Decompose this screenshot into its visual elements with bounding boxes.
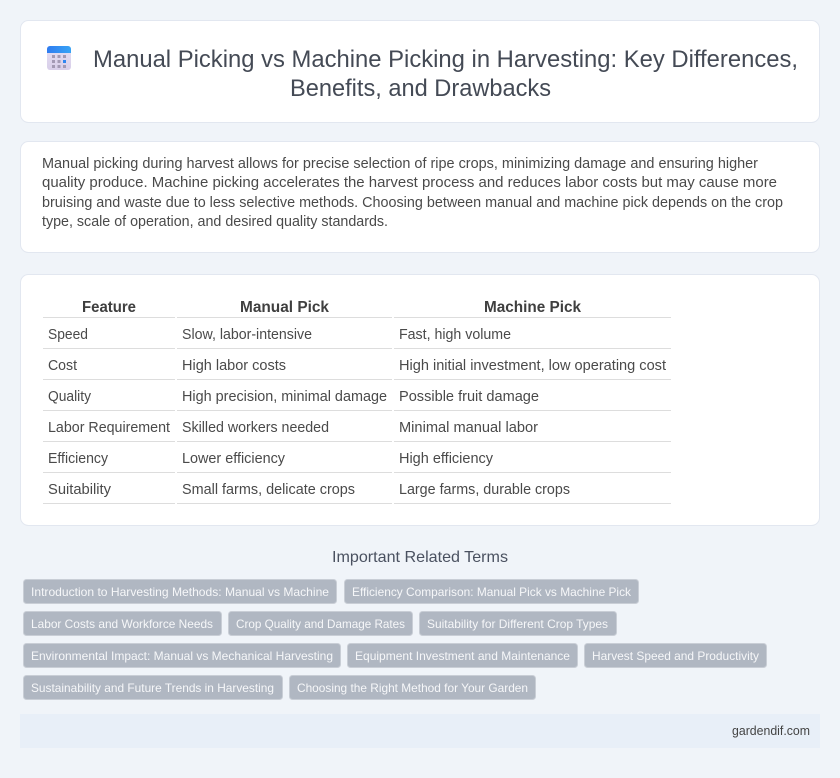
row: speed: Fast, high volume	[399, 327, 511, 343]
related term tags	[24, 580, 766, 700]
title: Benefits, and Drawbacks	[290, 75, 551, 102]
related term tags: Sustainability and Future Trends in Harvesting	[31, 681, 274, 695]
related term tags: Efficiency Comparison: Manual Pick vs Machine Pick	[352, 585, 632, 599]
header panel	[20, 20, 820, 122]
row: quality	[48, 389, 539, 405]
table header: Machine Pick	[484, 299, 581, 316]
row: cost	[48, 358, 666, 374]
row: efficiency: Efficiency	[48, 451, 109, 467]
intro text block: Manual picking during harvest allows for precise selection of ripe crops, minimizing damage and ensuring higher	[42, 156, 758, 172]
intro text block: type, scale of operation, and desired quality standards.	[42, 214, 388, 230]
related term tags: Suitability for Different Crop Types	[427, 617, 608, 631]
row: speed: Slow, labor-intensive	[182, 327, 312, 343]
panel: comparison table	[20, 274, 820, 526]
row: efficiency: High efficiency	[399, 451, 494, 467]
related term tags: Labor Costs and Workforce Needs	[31, 617, 213, 631]
table header: Feature	[82, 299, 136, 316]
related term tags: Environmental Impact: Manual vs Mechanical Harvesting	[31, 649, 333, 663]
panel: introduction	[20, 142, 820, 252]
row: labor requirement	[48, 420, 538, 436]
intro text block	[42, 156, 783, 230]
intro text block: quality produce. Machine picking accelerates the harvest process and reduces labor costs but may cause more	[42, 175, 777, 191]
table header	[82, 299, 581, 316]
footer bar: gardendif.com	[732, 724, 810, 738]
row: suitability: Suitability	[48, 482, 112, 498]
footer bar	[20, 714, 820, 748]
row: quality: Possible fruit damage	[399, 389, 539, 405]
intro text block: bruising and waste due to less selective methods. Choosing between manual and machine pick depends on the crop	[42, 195, 783, 211]
row: labor requirement: Minimal manual labor	[399, 420, 538, 436]
row: cost: High labor costs	[182, 358, 286, 374]
heading: related terms: Important Related Terms	[332, 549, 508, 566]
row: quality: Quality	[48, 389, 92, 405]
row: suitability	[48, 482, 570, 498]
row: efficiency	[48, 451, 494, 467]
title	[93, 46, 798, 102]
table header: Manual Pick	[240, 299, 329, 316]
row: efficiency: Lower efficiency	[182, 451, 286, 467]
row: speed: Speed	[48, 327, 88, 343]
row: cost: Cost	[48, 358, 77, 374]
related term tags: Introduction to Harvesting Methods: Manual vs Machine	[31, 585, 329, 599]
row: quality: High precision, minimal damage	[182, 389, 387, 405]
related term tags: Choosing the Right Method for Your Garden	[297, 681, 528, 695]
row: suitability: Small farms, delicate crops	[182, 482, 355, 498]
row: labor requirement: Skilled workers needed	[182, 420, 329, 436]
related term tags: Equipment Investment and Maintenance	[355, 649, 570, 663]
icon: calendar	[47, 46, 71, 70]
title: Manual Picking vs Machine Picking in Harvesting: Key Differences,	[93, 46, 798, 73]
row: speed	[48, 327, 511, 343]
related term tags: Crop Quality and Damage Rates	[236, 617, 405, 631]
row: labor requirement: Labor Requirement	[48, 420, 170, 436]
row: suitability: Large farms, durable crops	[399, 482, 570, 498]
row: cost: High initial investment, low operating cost	[399, 358, 666, 374]
related term tags: Harvest Speed and Productivity	[592, 649, 759, 663]
